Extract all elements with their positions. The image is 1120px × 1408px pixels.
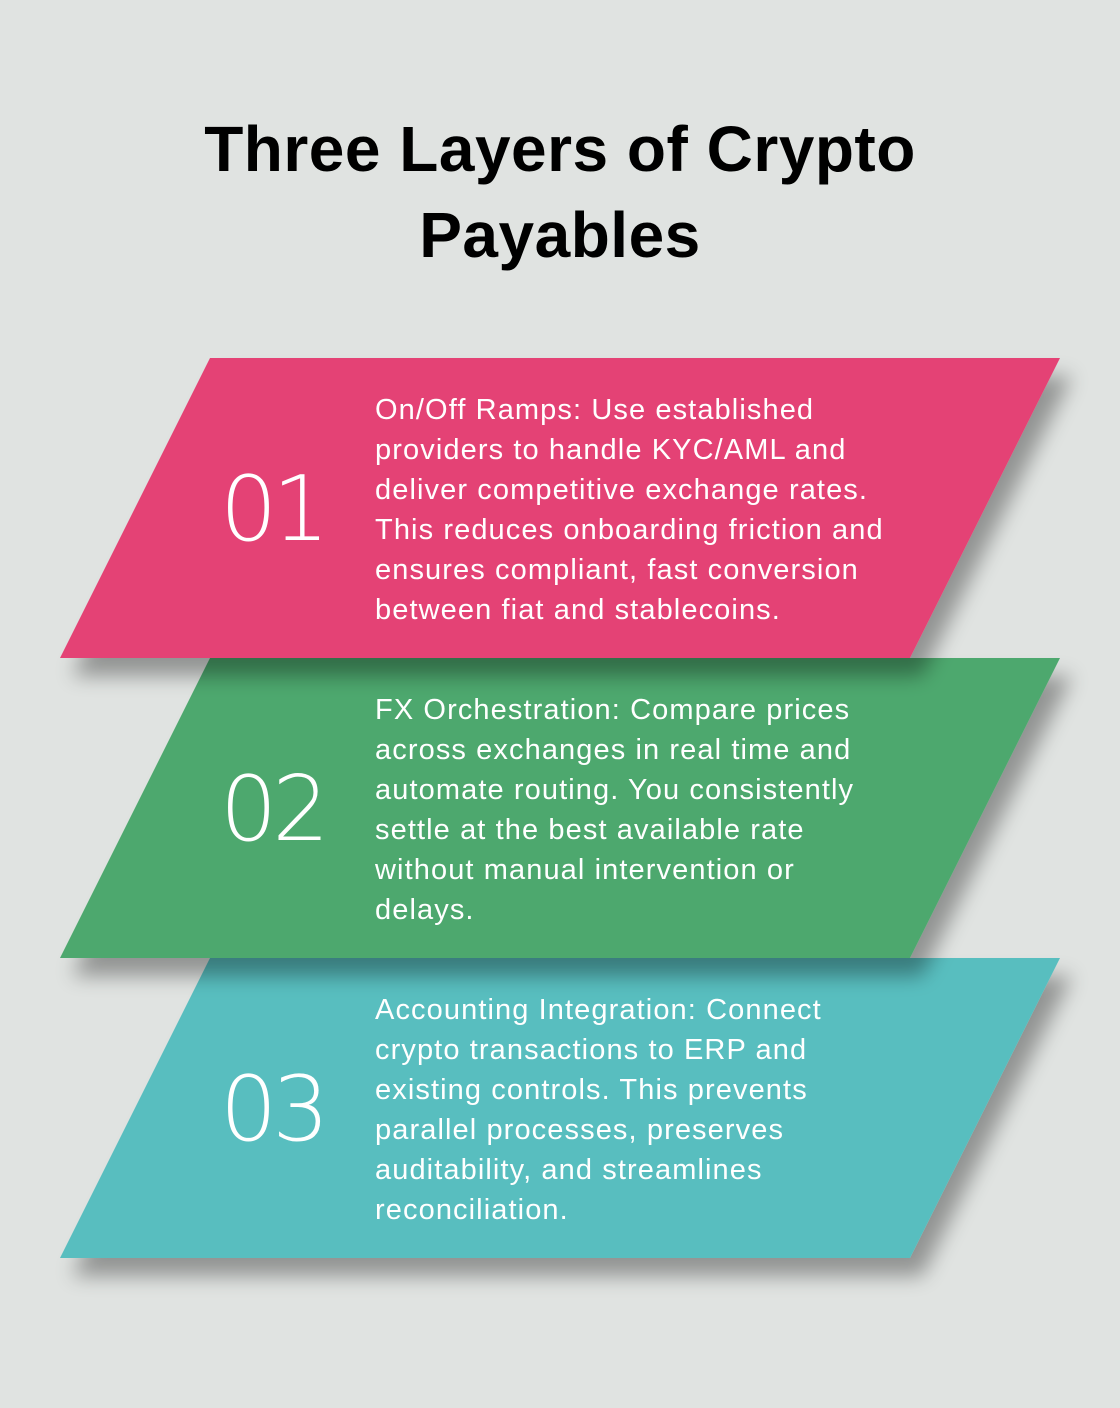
panel 02 — [220, 694, 854, 926]
text 02: delays. — [375, 894, 475, 926]
text 02: automate routing. You consistently — [375, 774, 854, 806]
title — [204, 113, 916, 271]
text 01: deliver competitive exchange rates. — [375, 474, 868, 506]
text 01: ensures compliant, fast conversion — [375, 554, 859, 586]
text 02: across exchanges in real time and — [375, 734, 851, 766]
title: Three Layers of Crypto — [204, 113, 916, 185]
text 03: Accounting Integration: Connect — [375, 994, 822, 1026]
text 01: between fiat and stablecoins. — [375, 594, 781, 626]
text 02: settle at the best available rate — [375, 814, 805, 846]
text 03 — [375, 994, 822, 1226]
number 01: 01 — [220, 457, 325, 562]
number 03: 03 — [220, 1057, 325, 1162]
text 01: This reduces onboarding friction and — [375, 514, 884, 546]
panel 01 — [220, 394, 884, 626]
text 03: existing controls. This prevents — [375, 1074, 808, 1106]
text 02: FX Orchestration: Compare prices — [375, 694, 850, 726]
text 03: parallel processes, preserves — [375, 1114, 784, 1146]
text 03: reconciliation. — [375, 1194, 569, 1226]
text 03: crypto transactions to ERP and — [375, 1034, 807, 1066]
panel: 03 shape — [60, 958, 1060, 1258]
text 02 — [375, 694, 854, 926]
number 02: 02 — [220, 757, 325, 862]
panel: 02 shape — [60, 658, 1060, 958]
text 01: providers to handle KYC/AML and — [375, 434, 846, 466]
title: Payables — [419, 199, 701, 271]
panel: 01 shape — [60, 358, 1060, 658]
text 01: On/Off Ramps: Use established — [375, 394, 814, 426]
text 01 — [375, 394, 884, 626]
text 03: auditability, and streamlines — [375, 1154, 763, 1186]
panel 03 — [220, 994, 822, 1226]
text 02: without manual intervention or — [375, 854, 795, 886]
